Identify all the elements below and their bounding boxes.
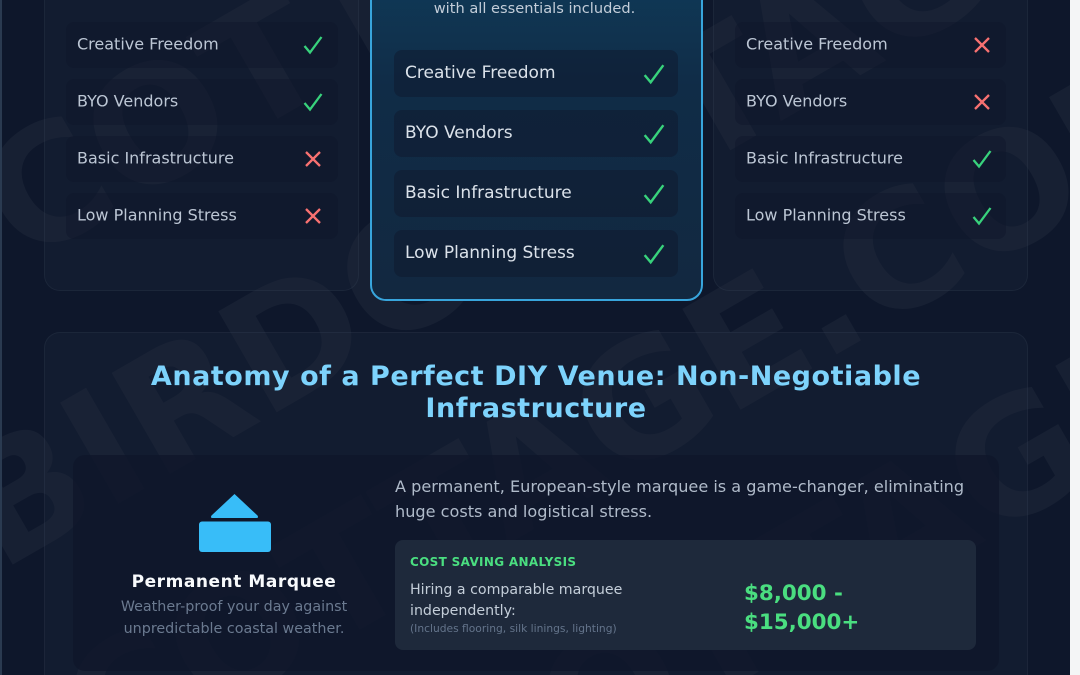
marquee explanation: A permanent, European-style marquee is a game-changer, eliminating	[395, 477, 964, 496]
row: basic infrastructure	[66, 136, 338, 182]
callout text	[410, 582, 622, 619]
row: creative freedom	[735, 22, 1006, 68]
left edge strip	[0, 0, 2, 675]
heading	[151, 361, 921, 424]
panel: featured venue option	[370, 0, 703, 301]
row: creative freedom: Creative Freedom	[77, 34, 219, 54]
marquee title: Permanent Marquee	[132, 572, 336, 592]
row: byo vendors: BYO Vendors	[405, 122, 513, 142]
panel: infrastructure section	[44, 332, 1028, 675]
row: low planning stress: Low Planning Stress	[746, 206, 906, 224]
row: basic infrastructure	[735, 136, 1006, 182]
row: byo vendors	[735, 79, 1006, 125]
marquee description: unpredictable coastal weather.	[124, 620, 344, 636]
callout text: Hiring a comparable marquee	[410, 582, 622, 598]
panel: left venue option	[44, 0, 359, 291]
row: low planning stress	[66, 193, 338, 239]
row: low planning stress: Low Planning Stress	[405, 242, 575, 262]
row: byo vendors: BYO Vendors	[77, 92, 178, 110]
row: byo vendors	[394, 110, 678, 157]
marquee explanation	[395, 477, 964, 521]
panel: permanent marquee	[73, 455, 999, 671]
row: low planning stress	[735, 193, 1006, 239]
row: basic infrastructure: Basic Infrastructure	[405, 182, 572, 202]
row: low planning stress: Low Planning Stress	[77, 206, 237, 224]
callout label: COST SAVING ANALYSIS	[410, 555, 576, 569]
heading: Anatomy of a Perfect DIY Venue: Non-Negotiable	[151, 361, 921, 392]
row: basic infrastructure	[394, 170, 678, 217]
row: creative freedom: Creative Freedom	[405, 62, 556, 82]
callout footnote: (Includes flooring, silk linings, lighting)	[410, 622, 617, 635]
callout amount	[744, 581, 859, 634]
panel: right venue option	[713, 0, 1028, 291]
row: basic infrastructure: Basic Infrastructure	[77, 148, 234, 168]
icon: marquee tent	[199, 494, 271, 552]
row: basic infrastructure: Basic Infrastructure	[746, 148, 903, 168]
marquee description	[121, 599, 347, 636]
row: creative freedom	[66, 22, 338, 68]
heading: Infrastructure	[425, 393, 647, 424]
callout text: independently:	[410, 603, 516, 619]
marquee explanation: huge costs and logistical stress.	[395, 502, 652, 521]
row: byo vendors: BYO Vendors	[746, 92, 847, 110]
row: byo vendors	[66, 79, 338, 125]
row: creative freedom: Creative Freedom	[746, 34, 888, 54]
subtitle: with all essentials included.	[434, 0, 635, 17]
right page margin	[1070, 0, 1080, 675]
callout: cost saving analysis	[395, 540, 976, 650]
callout amount: $8,000 -	[744, 581, 843, 606]
callout amount: $15,000+	[744, 610, 859, 634]
row: low planning stress	[394, 230, 678, 277]
marquee description: Weather-proof your day against	[121, 599, 347, 615]
row: creative freedom	[394, 50, 678, 97]
